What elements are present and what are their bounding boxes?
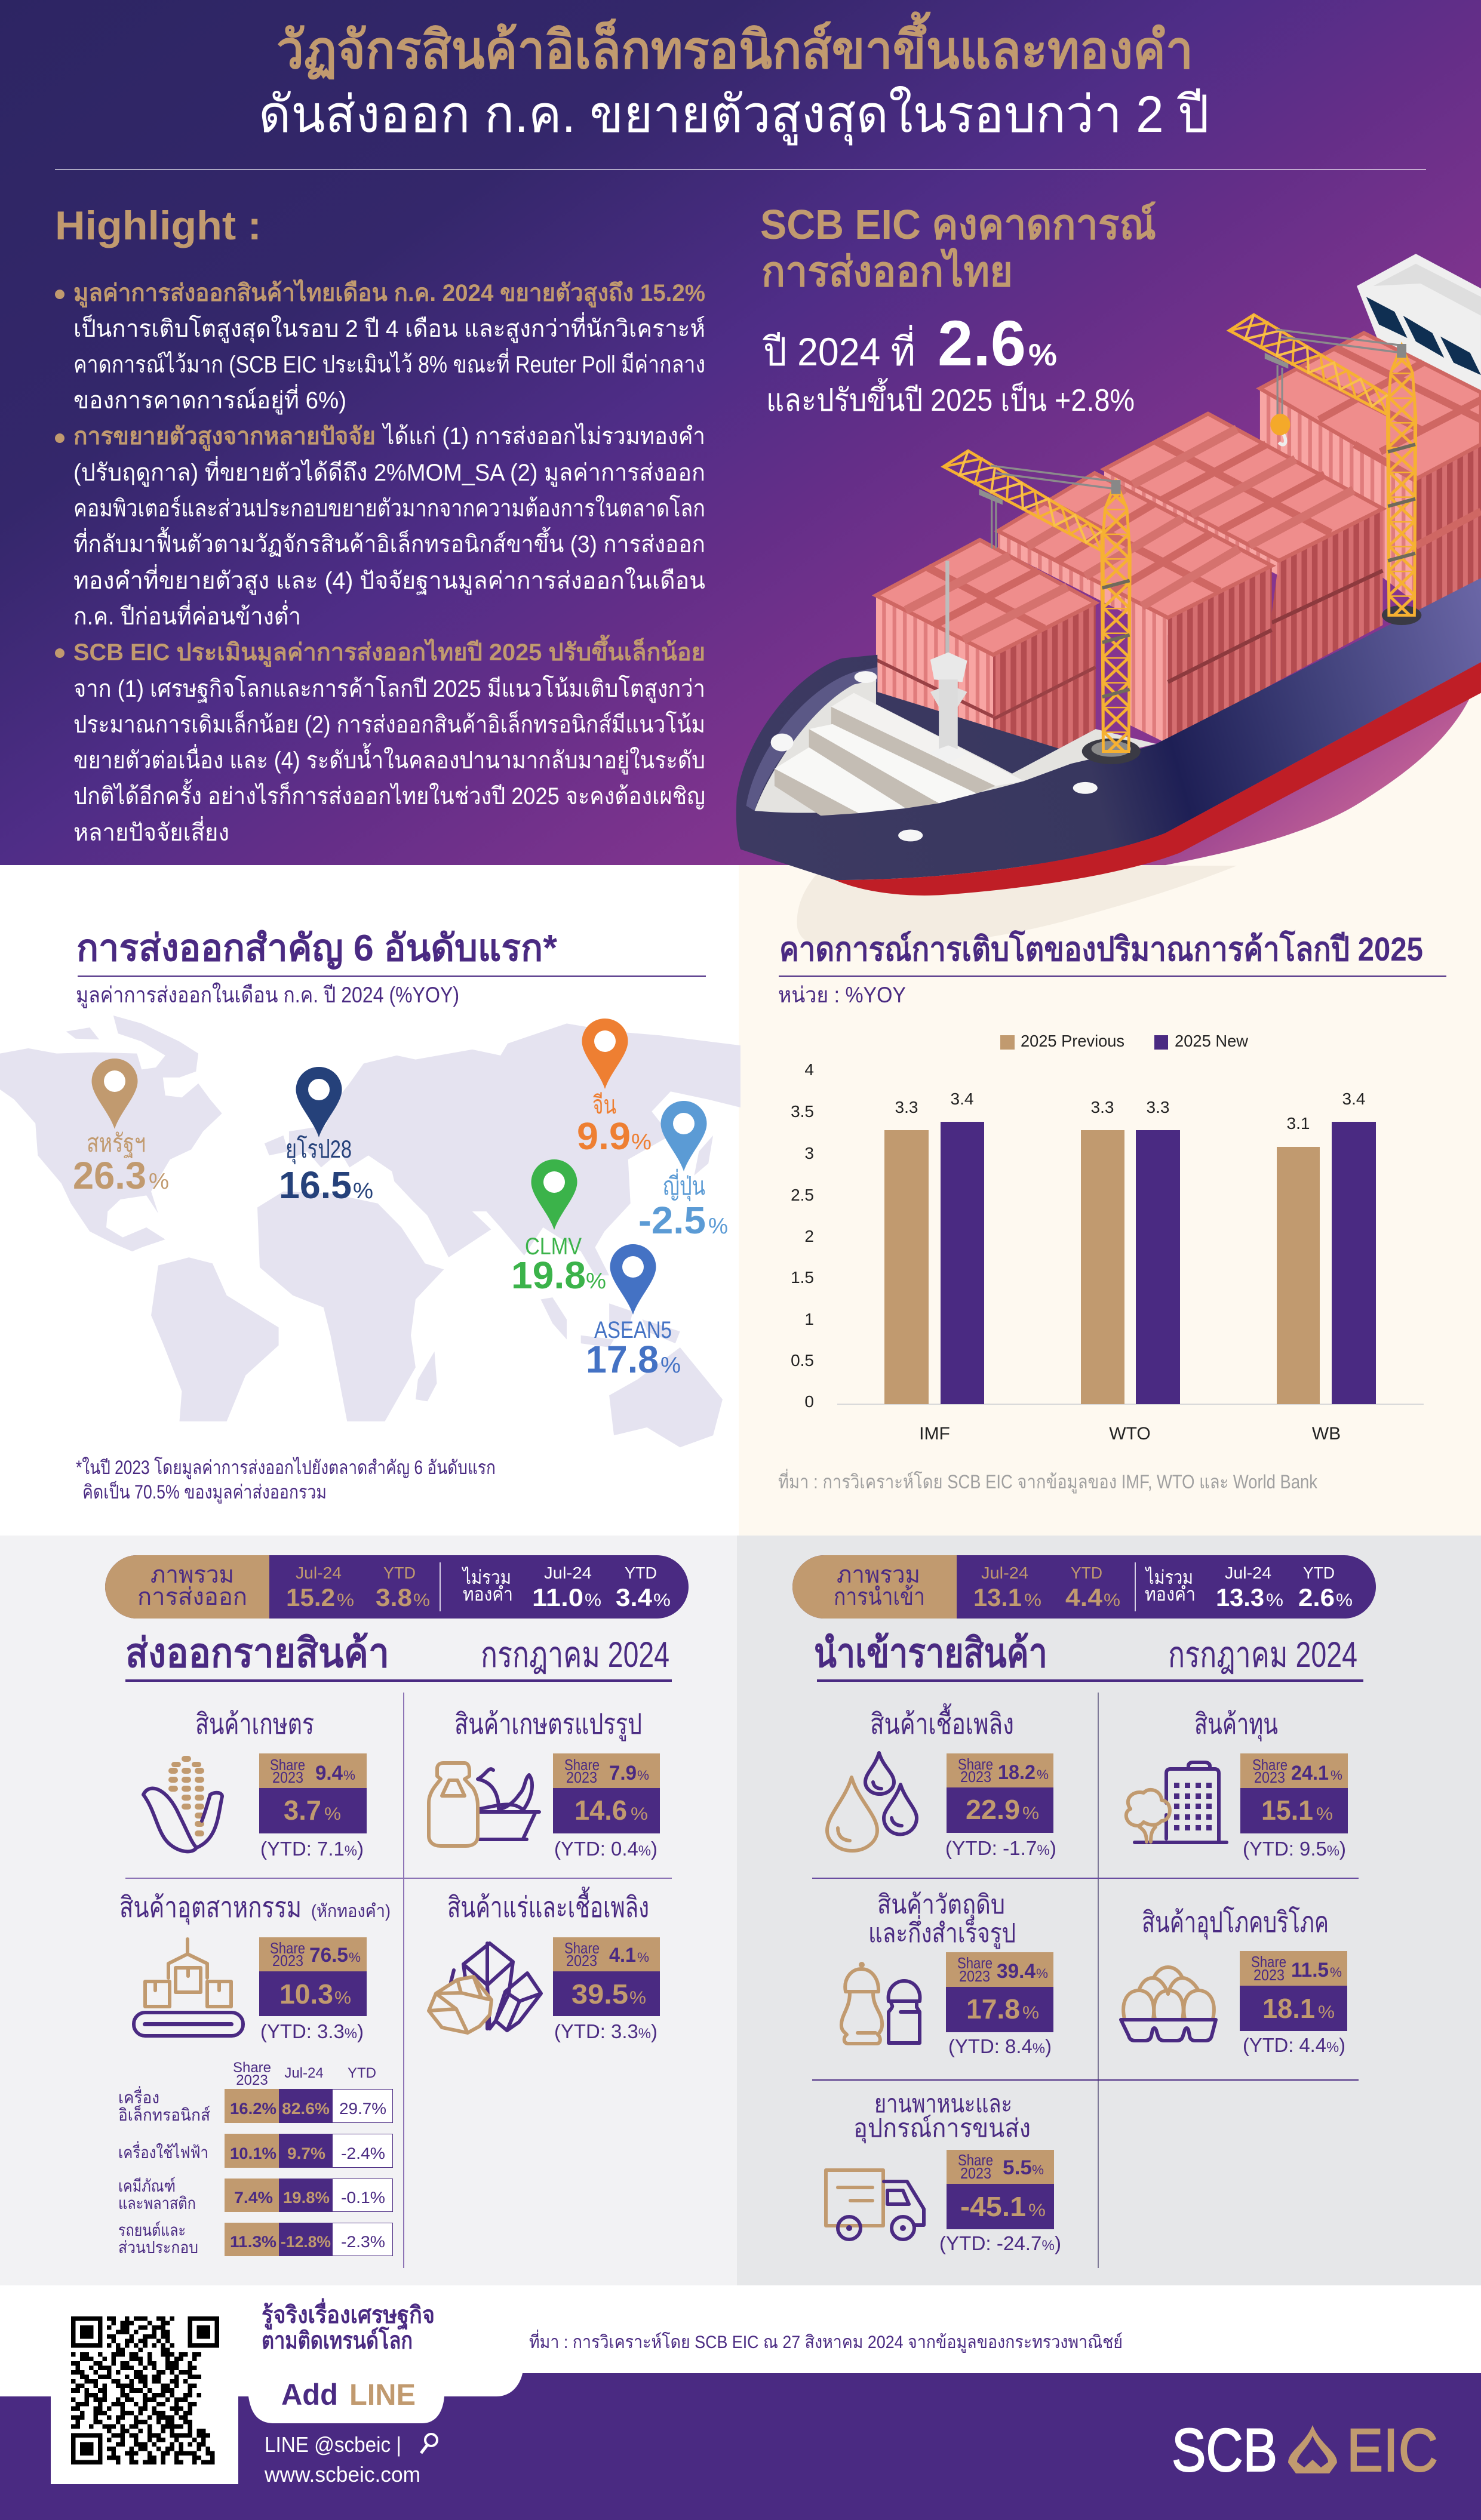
bow inner band <box>746 667 877 811</box>
stat box <box>259 1753 367 1860</box>
cell: industrial goods: (หักทองคำ) <box>311 1901 391 1921</box>
stat box: Share <box>564 1939 600 1957</box>
footnote <box>76 1457 496 1504</box>
export overview pill: YTD <box>383 1564 416 1582</box>
pin: USA: % <box>149 1169 169 1194</box>
bullet 3: ขยายตัวต่อเนื่อง และ (4) ระดับน้ำในคลองปานามากลับมาอยู่ในระดับ <box>73 743 705 774</box>
stat box: 18.2 <box>998 1761 1036 1784</box>
stat box <box>946 1952 1053 2057</box>
cell: minerals and fuels: สินค้าแร่และเชื้อเพลิง <box>447 1887 649 1924</box>
export overview pill: Jul-24 <box>296 1564 342 1582</box>
bar chart: 3.4 <box>951 1090 973 1108</box>
export overview pill: การส่งออก <box>137 1584 247 1610</box>
mast <box>929 561 967 764</box>
table: industrial sub-categories <box>118 2060 393 2257</box>
stat box: % <box>1022 1804 1039 1823</box>
pin: CLMV: CLMV <box>525 1233 582 1260</box>
row: electronics: 16.2% <box>230 2100 276 2118</box>
bullet 1: คาดการณ์ไว้มาก (SCB EIC ประเมินไว้ 8% ขณะที่ Reuter Poll มีค่ากลาง <box>73 348 705 378</box>
footnote: *ในปี 2023 โดยมูลค่าการส่งออกไปยังตลาดสำคัญ 6 อันดับแรก <box>76 1457 496 1479</box>
bar chart: 2.5 <box>791 1186 814 1204</box>
cell: processed agriculture: สินค้าเกษตรแปรรูป <box>454 1709 642 1741</box>
stat box: (YTD: 3.3%) <box>554 2020 657 2042</box>
stat box: % <box>1318 2002 1335 2022</box>
stat box: Share <box>270 1939 305 1957</box>
stat box: -45.1 <box>960 2191 1026 2222</box>
cell: raw materials <box>841 1890 1053 2057</box>
row: electrical appliances: 9.7% <box>287 2144 325 2162</box>
bullet 1: ของการคาดการณ์อยู่ที่ 6%) <box>73 384 346 414</box>
stat box: (YTD: 8.4%) <box>948 2035 1052 2057</box>
SCB EIC logo: SCB <box>1172 2416 1277 2484</box>
stat box: % <box>1037 1767 1049 1782</box>
stat box: 14.6 <box>574 1795 627 1826</box>
cell: agriculture <box>143 1709 367 1860</box>
pin: Japan: ญี่ปุ่น <box>663 1169 705 1202</box>
Add LINE: LINE <box>349 2378 416 2411</box>
stat box: 2023 <box>959 1967 990 1985</box>
ship shadow on cream <box>797 865 1236 949</box>
import overview pill: YTD <box>1303 1564 1335 1582</box>
row: chemicals and plastics: และพลาสติก <box>118 2194 196 2213</box>
stat box: 76.5 <box>309 1944 348 1967</box>
stat box: % <box>1036 1966 1048 1981</box>
bullet 2: ได้แก่ (1) การส่งออกไม่รวมทองคำ <box>382 423 705 450</box>
left white section background <box>0 865 739 1536</box>
bar chart: 3.3 <box>1147 1098 1169 1116</box>
footer background <box>0 2285 1481 2520</box>
import overview pill: ไม่รวม <box>1144 1567 1193 1588</box>
stat box: Share <box>270 1756 305 1774</box>
bullet 2: การขยายตัวสูงจากหลายปัจจัย <box>73 423 376 451</box>
bullet 2 <box>55 423 705 630</box>
forecast callout: และปรับขึ้นปี 2025 เป็น +2.8% <box>766 378 1135 418</box>
bullet 2: คอมพิวเตอร์และส่วนประกอบขยายตัวมากจากความต้องการในตลาดโลก <box>73 494 705 522</box>
bar chart: 3.3 <box>1091 1098 1114 1116</box>
export overview pill: % <box>653 1590 671 1610</box>
icon: building and tree <box>1126 1762 1227 1842</box>
cell: fuel <box>827 1703 1056 1859</box>
stat box: % <box>324 1804 341 1824</box>
import overview pill: 13.1 <box>973 1583 1022 1611</box>
export overview pill: % <box>413 1590 430 1610</box>
import overview pill: % <box>1266 1590 1283 1610</box>
stat box: % <box>1330 1965 1342 1980</box>
stat box: Share <box>564 1756 600 1774</box>
stat box <box>1240 1753 1348 1860</box>
section heading: กรกฎาคม 2024 <box>481 1635 669 1675</box>
heading: การส่งออกสำคัญ 6 อันดับแรก* <box>76 928 558 970</box>
legend: 2025 New <box>1175 1032 1249 1050</box>
icon: corn <box>143 1756 222 1851</box>
Add LINE: Add <box>281 2378 338 2411</box>
table header: YTD <box>348 2065 376 2081</box>
pin: Japan: % <box>708 1214 728 1239</box>
import overview pill: ภาพรวม <box>837 1562 920 1588</box>
stat box <box>1240 1951 1347 2056</box>
bar chart: WTO <box>1109 1424 1151 1444</box>
stat box: 15.1 <box>1261 1795 1313 1826</box>
bullet 1: มูลค่าการส่งออกสินค้าไทยเดือน ก.ค. 2024 ขยายตัวสูงถึง 15.2% <box>73 279 705 307</box>
containers: rear stack <box>1260 333 1481 613</box>
bullet 2: ทองคำที่ขยายตัวสูง และ (4) ปัจจัยฐานมูลค่าการส่งออกในเดือน <box>73 564 705 595</box>
row: electronics: อิเล็กทรอนิกส์ <box>118 2104 210 2124</box>
row: cars and parts: -12.8% <box>281 2233 331 2251</box>
stat box <box>553 1753 660 1860</box>
cell: raw materials: สินค้าวัตถุดิบ <box>877 1890 1005 1921</box>
tagline: ตามติดเทรนด์โลก <box>262 2327 413 2354</box>
cell: raw materials: และกึ่งสำเร็จรูป <box>868 1915 1016 1949</box>
section heading: นำเข้ารายสินค้า <box>814 1630 1047 1676</box>
row: electrical appliances <box>118 2134 393 2168</box>
unit: หน่วย : %YOY <box>778 983 906 1007</box>
bar chart: 0 <box>804 1392 814 1411</box>
footer purple band with Add LINE tab <box>0 2373 1481 2520</box>
import overview pill: ทองคำ <box>1145 1583 1196 1605</box>
import overview pill: YTD <box>1071 1564 1102 1582</box>
section heading <box>814 1630 1363 1682</box>
containers: upper centre stack <box>1104 414 1382 685</box>
pin: China <box>577 1019 652 1158</box>
bar chart: IMF <box>919 1424 950 1444</box>
stat box: 17.8 <box>966 1993 1020 2024</box>
stat box: 24.1 <box>1291 1762 1329 1784</box>
stat box: 4.1 <box>609 1944 636 1967</box>
forecast callout: การส่งออกไทย <box>761 247 1013 295</box>
stat box: 2023 <box>1253 1966 1285 1984</box>
row: cars and parts: ส่วนประกอบ <box>118 2238 198 2257</box>
stat box: 3.7 <box>284 1795 321 1826</box>
cell: capital goods: สินค้าทุน <box>1194 1709 1278 1741</box>
panel: world trade forecast <box>778 930 1446 1494</box>
forecast callout: SCB EIC คงคาดการณ์ <box>760 201 1156 248</box>
source: ที่มา : การวิเคราะห์โดย SCB EIC จากข้อมูลของ IMF, WTO และ World Bank <box>778 1469 1318 1494</box>
bar chart: 1.5 <box>791 1268 814 1287</box>
stat box: (YTD: -1.7%) <box>945 1837 1056 1859</box>
export overview pill: % <box>585 1590 601 1610</box>
icon: drops <box>827 1753 917 1851</box>
pin: China: จีน <box>592 1091 616 1119</box>
import overview pill: Jul-24 <box>1225 1564 1271 1582</box>
export overview pill <box>105 1555 689 1619</box>
world map <box>0 1016 740 1447</box>
stat box: (YTD: 9.5%) <box>1243 1838 1346 1860</box>
import overview pill: การนำเข้า <box>834 1584 925 1610</box>
stat box <box>259 1937 367 2042</box>
bullet 3 <box>55 635 705 846</box>
tagline: รู้จริงเรื่องเศรษฐกิจ <box>262 2298 435 2331</box>
row: chemicals and plastics <box>118 2177 393 2213</box>
stat box: 11.5 <box>1291 1959 1329 1981</box>
bullet 2: (ปรับฤดูกาล) ที่ขยายตัวได้ดีถึง 2%MOM_SA (2) มูลค่าการส่งออก <box>73 456 705 487</box>
stat box: 2023 <box>960 1768 991 1786</box>
cell: consumer goods <box>1121 1906 1347 2056</box>
pin: USA <box>73 1059 169 1197</box>
bar chart: 3.5 <box>791 1102 814 1121</box>
pin: China: % <box>631 1130 652 1155</box>
stat box: 9.4 <box>315 1762 343 1784</box>
row: chemicals and plastics: เคมีภัณฑ์ <box>118 2177 176 2195</box>
stat box <box>939 2150 1061 2254</box>
bullet 3: หลายปัจจัยเสี่ยง <box>73 816 229 846</box>
cell: vehicles and transport <box>826 2090 1061 2254</box>
stat box: 2023 <box>272 1768 303 1786</box>
panel: top 6 export markets <box>0 928 740 1504</box>
pin: USA: 26.3 <box>73 1154 146 1197</box>
bar chart: 3.3 <box>895 1098 918 1116</box>
row: cars and parts: รถยนต์และ <box>118 2221 186 2239</box>
import overview pill: 13.3 <box>1216 1583 1264 1611</box>
icon: truck <box>826 2170 924 2239</box>
bullet 2: ก.ค. ปีก่อนที่ค่อนข้างต่ำ <box>73 600 301 630</box>
row: electrical appliances: 10.1% <box>230 2144 276 2162</box>
legend <box>1000 1032 1249 1050</box>
bullet 1 <box>55 279 705 414</box>
title <box>259 11 1209 146</box>
pin: ASEAN5 <box>586 1244 681 1381</box>
pin: CLMV <box>511 1159 606 1297</box>
section heading <box>125 1630 672 1682</box>
row: cars and parts: 11.3% <box>230 2233 276 2251</box>
bullet 3: SCB EIC ประเมินมูลค่าการส่งออกไทยปี 2025 ปรับขึ้นเล็กน้อย <box>73 635 705 667</box>
panel: exports by product <box>105 1555 689 2268</box>
cell: minerals and fuels <box>429 1887 660 2042</box>
pin: Japan: -2.5 <box>638 1199 706 1242</box>
stat box: (YTD: 4.4%) <box>1243 2034 1345 2056</box>
bar chart: 2 <box>804 1227 814 1245</box>
export overview pill: Jul-24 <box>544 1564 592 1582</box>
import panel background <box>737 1536 1481 2285</box>
row: electronics <box>118 2086 393 2124</box>
portholes <box>771 671 1098 841</box>
table header: 2023 <box>236 2072 268 2088</box>
stat box: % <box>631 1804 648 1824</box>
cream sweep at lower right of header <box>1166 675 1481 866</box>
stat box: 18.1 <box>1262 1993 1315 2024</box>
export overview pill: 11.0 <box>532 1583 583 1611</box>
row: cars and parts: -2.3% <box>341 2233 385 2251</box>
containers: front stack <box>876 540 1096 774</box>
hull red stripe <box>835 662 1481 896</box>
stat box: 2023 <box>566 1952 597 1970</box>
stat box: (YTD: 0.4%) <box>554 1838 657 1860</box>
import overview pill: % <box>1104 1590 1120 1610</box>
stat box: 5.5 <box>1003 2156 1032 2179</box>
bar chart <box>791 1060 1424 1444</box>
pin: USA: สหรัฐฯ <box>87 1129 146 1158</box>
export panel background <box>0 1536 737 2285</box>
icon: bottle and fruit basket <box>429 1763 539 1846</box>
pin: Japan <box>638 1101 728 1242</box>
ship shadow on purple <box>1142 671 1469 865</box>
cell: processed agriculture <box>429 1709 660 1860</box>
footnote: คิดเป็น 70.5% ของมูลค่าส่งออกรวม <box>82 1481 327 1504</box>
cell: industrial goods: สินค้าอุตสาหกรรม <box>119 1892 302 1925</box>
tagline <box>262 2298 435 2354</box>
stat box: 22.9 <box>966 1794 1020 1825</box>
export overview pill: ภาพรวม <box>150 1562 234 1588</box>
title: วัฏจักรสินค้าอิเล็กทรอนิกส์ขาขึ้นและทองคำ <box>276 11 1193 80</box>
cell: industrial goods <box>118 1892 393 2257</box>
stat box: (YTD: 7.1%) <box>260 1838 364 1860</box>
stat box: % <box>1331 1768 1342 1783</box>
pin: ASEAN5: % <box>660 1353 681 1378</box>
stat box: 2023 <box>566 1768 597 1786</box>
row: chemicals and plastics: -0.1% <box>341 2189 385 2207</box>
stat box: % <box>1028 2201 1046 2220</box>
hull <box>736 578 1481 880</box>
import overview pill: 2.6 <box>1298 1583 1335 1611</box>
export overview pill: 3.8 <box>376 1583 412 1611</box>
stat box: % <box>349 1950 361 1965</box>
icon: gems <box>429 1943 541 2033</box>
row: electronics: เครื่อง <box>118 2086 159 2107</box>
pin: CLMV: % <box>586 1269 606 1294</box>
stat box: % <box>343 1768 355 1783</box>
forecast callout: ปี 2024 ที่ <box>763 325 915 374</box>
row: electrical appliances: -2.4% <box>341 2144 385 2162</box>
right cream section background <box>739 865 1481 1536</box>
export overview pill: ไม่รวม <box>461 1567 511 1588</box>
stat box: 39.4 <box>997 1960 1036 1983</box>
forecast callout <box>760 201 1156 418</box>
bar chart: 3 <box>804 1144 814 1162</box>
import overview pill: % <box>1024 1590 1041 1610</box>
panel: imports by product <box>792 1555 1376 2268</box>
stat box: 2023 <box>272 1952 303 1970</box>
stat box: 2023 <box>1254 1768 1285 1786</box>
export overview pill: 3.4 <box>616 1583 653 1611</box>
bar chart: 3.1 <box>1287 1114 1310 1133</box>
cell: fuel: สินค้าเชื้อเพลิง <box>870 1703 1014 1740</box>
row: chemicals and plastics: 19.8% <box>283 2189 330 2207</box>
Add LINE <box>281 2378 416 2411</box>
deck <box>755 679 1156 816</box>
pin: ASEAN5: 17.8 <box>586 1338 659 1381</box>
bullet 1: เป็นการเติบโตสูงสุดในรอบ 2 ปี 4 เดือน และสูงกว่าที่นักวิเคราะห์ <box>73 312 705 343</box>
cell: agriculture: สินค้าเกษตร <box>195 1709 314 1740</box>
title: ดันส่งออก ก.ค. ขยายตัวสูงสุดในรอบกว่า 2 ปี <box>259 86 1209 146</box>
website: www.scbeic.com <box>264 2462 420 2487</box>
cell: consumer goods: สินค้าอุปโภคบริโภค <box>1142 1906 1329 1940</box>
forecast callout: % <box>1028 338 1057 373</box>
pin: ASEAN5: ASEAN5 <box>594 1317 672 1343</box>
icon: salt and pepper shakers <box>841 1962 920 2044</box>
source: ที่มา : การวิเคราะห์โดย SCB EIC ณ 27 สิงหาคม 2024 จากข้อมูลของกระทรวงพาณิชย์ <box>529 2330 1123 2353</box>
import overview pill: % <box>1336 1590 1353 1610</box>
row: chemicals and plastics: 7.4% <box>234 2189 273 2207</box>
forecast callout: 2.6 <box>938 307 1026 379</box>
table header: Jul-24 <box>284 2065 324 2081</box>
stat box: 2023 <box>960 2164 991 2182</box>
LINE handle: LINE @scbeic | <box>265 2432 401 2457</box>
table header: Share <box>233 2060 271 2076</box>
cell: vehicles and transport: ยานพาหนะและ <box>874 2090 1012 2118</box>
SCB EIC logo <box>1172 2416 1438 2484</box>
stat box: (YTD: -24.7%) <box>939 2232 1061 2254</box>
icon: eggs <box>1121 1967 1216 2041</box>
containers: middle stack <box>998 473 1272 744</box>
stat box: Share <box>1251 1953 1286 1971</box>
stat box <box>945 1753 1056 1859</box>
stat box: 10.3 <box>279 1979 333 2010</box>
stat box: Share <box>1252 1756 1288 1774</box>
bullet 3: ประมาณการเดิมเล็กน้อย (2) การส่งออกสินค้าอิเล็กทรอนิกส์มีแนวโน้ม <box>73 710 705 738</box>
stat box: % <box>1316 1804 1333 1824</box>
row: cars and parts <box>118 2221 393 2257</box>
cell: capital goods <box>1126 1709 1348 1860</box>
export overview pill: % <box>337 1590 354 1610</box>
SCB EIC logo: EIC <box>1347 2416 1438 2484</box>
import overview pill: Jul-24 <box>981 1564 1028 1582</box>
bridge <box>1357 254 1481 400</box>
row: electrical appliances: เครื่องใช้ไฟฟ้า <box>118 2141 208 2162</box>
illustration: container ship <box>736 254 1481 896</box>
row: electronics: 82.6% <box>282 2100 330 2118</box>
import overview pill <box>792 1555 1376 1619</box>
bar chart: WB <box>1312 1424 1341 1444</box>
footer <box>51 2298 1438 2487</box>
stat box: 7.9 <box>609 1762 637 1784</box>
stat box <box>553 1937 660 2042</box>
pin: Europe: 16.5 <box>279 1164 352 1207</box>
export overview pill: ทองคำ <box>463 1583 513 1605</box>
table header <box>233 2060 376 2088</box>
pin: CLMV: 19.8 <box>511 1254 586 1297</box>
stat box: Share <box>958 2151 993 2169</box>
stat box: (YTD: 3.3%) <box>260 2020 364 2042</box>
section heading: ส่งออกรายสินค้า <box>125 1630 389 1676</box>
header background <box>0 0 1481 865</box>
stat box: % <box>629 1988 646 2008</box>
bar chart: 4 <box>804 1060 814 1079</box>
icon: factory conveyor <box>134 1939 243 2036</box>
panel: highlight <box>55 203 705 846</box>
bullet 3: จาก (1) เศรษฐกิจโลกและการค้าโลกปี 2025 มีแนวโน้มเติบโตสูงกว่า <box>73 675 705 703</box>
subtitle: มูลค่าการส่งออกในเดือน ก.ค. ปี 2024 (%YOY) <box>76 982 459 1008</box>
bar chart: 0.5 <box>791 1351 814 1370</box>
import overview pill: 4.4 <box>1065 1583 1103 1611</box>
bar chart: 1 <box>804 1310 814 1328</box>
export overview pill: 15.2 <box>286 1583 335 1611</box>
stat box: Share <box>958 1755 993 1773</box>
stat box: % <box>637 1768 649 1783</box>
pin: China: 9.9 <box>577 1115 631 1158</box>
bullet 2: ที่กลับมาฟื้นตัวตามวัฏจักรสินค้าอิเล็กทรอนิกส์ขาขึ้น (3) การส่งออก <box>73 527 705 558</box>
pin: Europe: ยุโรป28 <box>285 1134 352 1165</box>
row: electronics: 29.7% <box>339 2100 386 2118</box>
bullet 3: ปกติได้อีกครั้ง อย่างไรก็การส่งออกไทยในช่วงปี 2025 จะคงต้องเผชิญ <box>73 779 705 810</box>
legend: 2025 Previous <box>1021 1032 1124 1050</box>
stat box: 39.5 <box>571 1979 628 2010</box>
stat box: % <box>1022 2003 1039 2023</box>
QR code <box>51 2299 238 2484</box>
export overview pill: YTD <box>625 1564 657 1582</box>
bar chart: 3.4 <box>1342 1090 1365 1108</box>
stat box: Share <box>957 1954 993 1972</box>
highlight heading: Highlight : <box>55 203 262 248</box>
stat box: % <box>334 1988 351 2008</box>
stat box: % <box>1032 2162 1044 2177</box>
pin: Europe <box>279 1067 373 1207</box>
pin: Europe: % <box>353 1179 373 1204</box>
cell: vehicles and transport: อุปกรณ์การขนส่ง <box>853 2114 1031 2144</box>
cranes <box>944 315 1421 764</box>
section heading: กรกฎาคม 2024 <box>1168 1635 1357 1675</box>
stat box: % <box>637 1950 649 1965</box>
